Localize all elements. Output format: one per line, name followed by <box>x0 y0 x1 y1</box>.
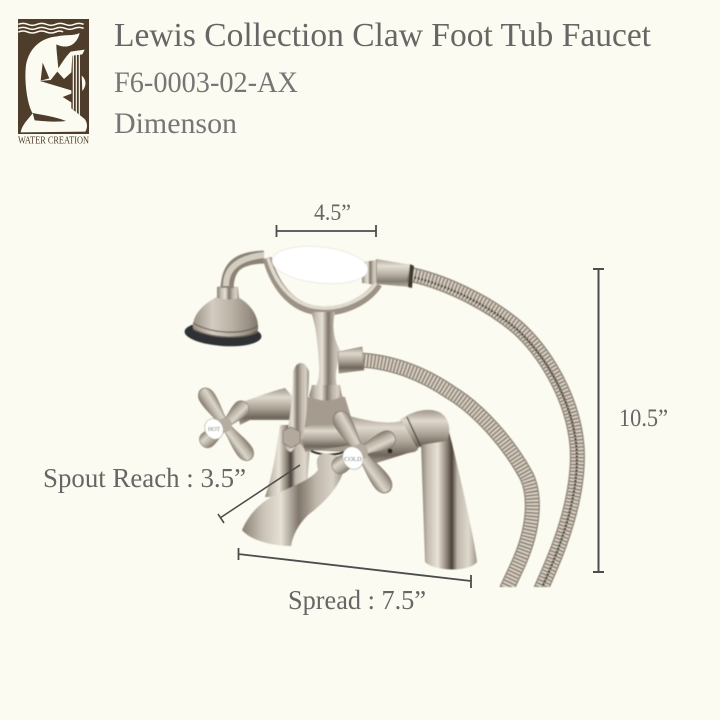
left cross handle <box>195 385 257 464</box>
spout <box>242 453 345 546</box>
porcelain handle <box>270 242 370 288</box>
left cross arm <box>236 388 300 425</box>
faucet illustration <box>184 242 577 602</box>
handset cradle <box>267 258 378 311</box>
dimension: spout reach 3.5 inches: Spout Reach : 3.5” <box>43 463 246 493</box>
central lever <box>283 363 309 452</box>
dimension: spout reach 3.5 inches <box>43 463 300 523</box>
dimension: height 10.5 inches: 10.5” <box>619 405 668 432</box>
model number: F6-0003-02-AX <box>114 66 298 99</box>
dimension: height 10.5 inches <box>593 269 668 572</box>
hose: handset to base <box>408 274 577 602</box>
subtitle: Dimenson <box>114 107 237 140</box>
central body <box>290 397 358 452</box>
logo: Water Creation <box>18 19 89 146</box>
right pillar <box>345 410 477 570</box>
dimension: width 4.5 inches <box>276 200 376 237</box>
dimension: spread 7.5 inches <box>238 548 471 615</box>
label: hot: HOT <box>208 427 220 433</box>
stem <box>309 312 344 398</box>
shower head <box>184 255 264 349</box>
hose nut <box>362 259 414 288</box>
back body <box>265 425 312 497</box>
dimension: spread 7.5 inches: Spread : 7.5” <box>288 585 426 615</box>
hose: stem to base <box>360 360 532 600</box>
label: cold: COLD <box>344 456 362 463</box>
dimension: width 4.5 inches: 4.5” <box>314 200 351 225</box>
title: Lewis Collection Claw Foot Tub Faucet <box>114 17 652 54</box>
right cross handle <box>329 408 398 497</box>
logo wordmark: WATER CREATION <box>18 136 89 146</box>
